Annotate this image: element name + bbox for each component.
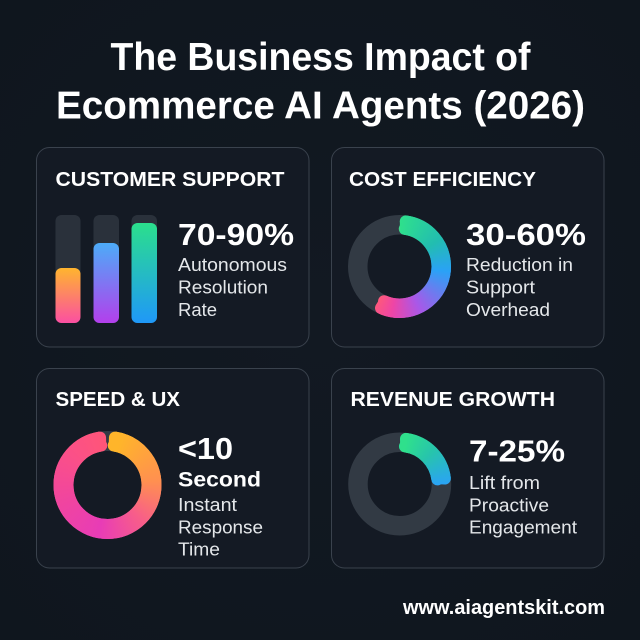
- stat description: Reduction in: [466, 254, 573, 275]
- heading: revenue growth: REVENUE GROWTH: [350, 388, 555, 411]
- donut chart: under 10 seconds: [54, 431, 162, 539]
- donut chart: 7-25%: [348, 432, 452, 536]
- heading: speed and ux: SPEED & UX: [56, 388, 180, 411]
- stat description: [178, 494, 263, 560]
- stat description: [178, 254, 287, 320]
- heading: cost efficiency: COST EFFICIENCY: [349, 168, 536, 191]
- stat description: Instant: [178, 494, 237, 515]
- donut chart: 30-60%: [348, 215, 451, 318]
- stat description: Lift from: [469, 472, 540, 493]
- stat description: Time: [178, 538, 220, 560]
- stat description: Rate: [178, 299, 217, 320]
- panel: customer support: [36, 148, 309, 347]
- panel: cost efficiency: [332, 148, 604, 347]
- stat description: Engagement: [469, 516, 577, 538]
- stat description: Support: [466, 276, 535, 298]
- title: The Business Impact of: [110, 36, 531, 79]
- stat description: Proactive: [469, 494, 549, 516]
- footer url: www.aiagentskit.com: [402, 597, 605, 619]
- stat: 70-90%: 70-90%: [178, 217, 294, 252]
- stat description: Resolution: [178, 276, 268, 298]
- title: Ecommerce AI Agents (2026): [56, 84, 585, 128]
- title: [56, 36, 585, 128]
- stat: 7-25%: 7-25%: [469, 434, 565, 468]
- stat description: [466, 254, 573, 320]
- panel: revenue growth: [332, 368, 604, 568]
- stat description: Overhead: [466, 299, 550, 320]
- stat description: Response: [178, 516, 263, 538]
- stat description: [469, 472, 577, 538]
- stat: under 10 second: Second: [178, 468, 261, 492]
- stat: under 10 second: <10: [178, 431, 233, 466]
- bar chart: [56, 215, 157, 323]
- stat: 30-60%: 30-60%: [466, 217, 586, 252]
- stat description: Autonomous: [178, 254, 287, 275]
- panel: speed and ux: [36, 368, 309, 568]
- stat: under 10 second: [178, 431, 261, 492]
- heading: customer support: CUSTOMER SUPPORT: [56, 168, 285, 191]
